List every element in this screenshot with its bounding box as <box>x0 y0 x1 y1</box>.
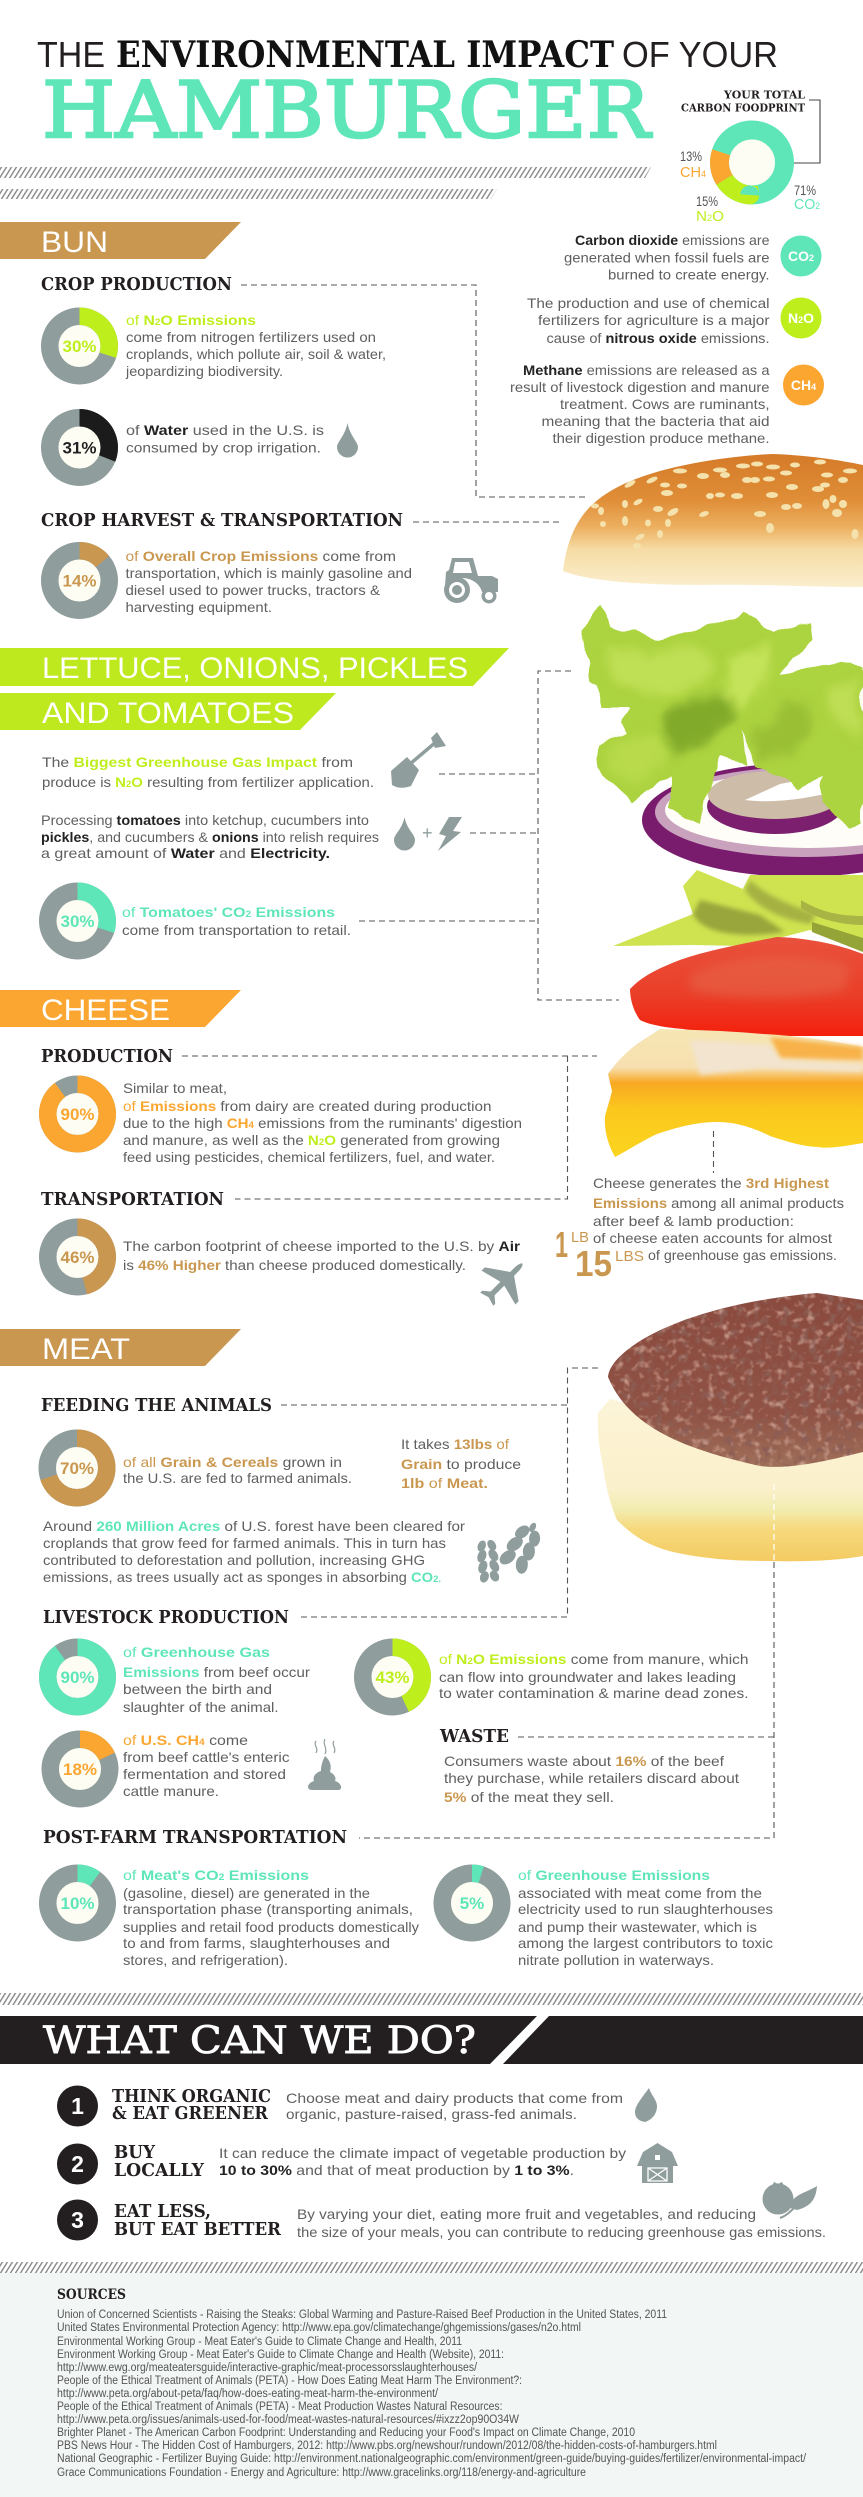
text: N2O emissions: croplands, which pollute air, soil & water, <box>126 346 386 362</box>
section banner: bun: BUN <box>41 226 108 259</box>
text: air transport: The carbon footprint of cheese imported to the U.S. by Air <box>123 1238 521 1254</box>
donut chart <box>707 118 797 207</box>
section banner: cheese <box>0 990 241 1027</box>
section banner: meat <box>0 1329 241 1366</box>
text: grain <box>123 1454 352 1486</box>
callout: cheese emissions: LBS <box>615 1248 644 1265</box>
action 3 text <box>297 2206 826 2240</box>
donut: 43% N2O: 43% <box>375 1668 410 1687</box>
nitrous oxide text: The production and use of chemical <box>527 295 770 311</box>
text: meat CO2 <box>123 1867 419 1968</box>
banner: what can we do: WHAT CAN WE DO? <box>43 2019 476 2062</box>
heading: livestock production: LIVESTOCK PRODUCTION <box>43 1607 289 1628</box>
CO2 badge <box>780 236 822 276</box>
action 2 text: It can reduce the climate impact of vegetable production by <box>219 2145 626 2161</box>
donut: 30% N2O <box>50 316 109 376</box>
action 1 text: organic, pasture-raised, grass-fed animals. <box>286 2106 577 2122</box>
action 1 title: & EAT GREENER <box>112 2103 269 2124</box>
text: processing: Processing tomatoes into ketchup, cucumbers into <box>41 812 369 828</box>
callout: cheese emissions: after beef & lamb production: <box>593 1213 794 1229</box>
sources list: PBS News Hour - The Hidden Cost of Hamburgers, 2012: http://www.pbs.org/newshour/rundown/2012/08/the-hidden-costs-of-hamburgers.html <box>57 2440 717 2452</box>
text: methane: cattle manure. <box>123 1783 219 1799</box>
text: waste: Consumers waste about 16% of the beef <box>444 1753 724 1769</box>
burger patty <box>608 1293 863 1467</box>
cheese <box>605 1029 863 1157</box>
nitrous oxide text: cause of nitrous oxide emissions. <box>546 330 770 346</box>
action 2 title: LOCALLY <box>114 2160 205 2181</box>
text: methane <box>123 1732 290 1799</box>
text: processing <box>41 812 379 861</box>
donut: 31% water <box>50 418 109 477</box>
carbon foodprint donut: 71% <box>794 182 816 198</box>
action 3 title <box>114 2201 282 2240</box>
text: meat CO2: transportation phase (transporting animals, <box>123 1901 413 1917</box>
text: forest cleared: Around 260 Million Acres of U.S. forest have been cleared for <box>43 1518 465 1534</box>
text: tomatoes <box>122 904 351 938</box>
text: dairy emissions: of Emissions from dairy are created during production <box>123 1098 492 1114</box>
donut: 46%: 46% <box>60 1248 95 1267</box>
text: water: of Water used in the U.S. is <box>126 422 324 438</box>
bottom bun <box>598 1399 863 1561</box>
icon: wheat <box>474 1515 550 1585</box>
text: manure <box>439 1651 748 1701</box>
carbon foodprint donut <box>680 88 820 225</box>
methane text: result of livestock digestion and manure <box>510 379 770 395</box>
CH4 badge: CH4 <box>791 377 816 393</box>
icon: leaf <box>635 2088 657 2122</box>
callout: cheese emissions: 1 <box>555 1224 568 1265</box>
text: methane: from beef cattle's enteric <box>123 1749 290 1765</box>
N2O badge: N2O <box>788 310 814 326</box>
text: forest cleared <box>43 1518 465 1585</box>
section banner: meat: MEAT <box>42 1333 130 1366</box>
sources list <box>57 2309 807 2479</box>
foodprint heading: YOUR TOTAL <box>723 88 805 102</box>
text: N2O emissions: come from nitrogen fertilizers used on <box>126 329 376 345</box>
section banner: cheese: CHEESE <box>41 994 170 1027</box>
donut: 30% tomatoes: 30% <box>60 912 95 931</box>
heading: post-farm transportation: POST-FARM TRANSPORTATION <box>43 1827 347 1848</box>
onion <box>642 763 863 877</box>
carbon dioxide text: Carbon dioxide emissions are <box>575 232 770 248</box>
text: tomatoes: of Tomatoes' CO 2 Emissions <box>122 904 335 920</box>
text: slaughterhouses: nitrate pollution in waterways. <box>518 1952 714 1968</box>
donut: 10%: 10% <box>60 1894 95 1913</box>
text: biggest impact: produce is N2O resulting from fertilizer application. <box>42 774 374 790</box>
carbon foodprint donut: CH4 <box>680 164 706 181</box>
title <box>37 34 778 156</box>
donut: 70% grain: 70% <box>60 1459 94 1478</box>
text: crop emissions: of Overall Crop Emissions come from <box>126 548 396 564</box>
callout: cheese emissions: 15 <box>575 1243 612 1284</box>
text: crop emissions: diesel used to power trucks, tractors & <box>126 582 381 598</box>
text: dairy emissions <box>123 1080 522 1165</box>
heading: waste: WASTE <box>439 1726 509 1747</box>
gas legend <box>510 232 824 446</box>
text: 13lbs of grain: 1lb of Meat. <box>401 1475 488 1491</box>
text: meat CO2: to and from farms, slaughterhouses and <box>123 1935 390 1951</box>
section banner: bun <box>0 222 241 259</box>
text: N2O emissions: jeopardizing biodiversity. <box>125 363 283 379</box>
donut: 10% <box>48 1873 107 1933</box>
methane text: meaning that the bacteria that aid <box>542 413 770 429</box>
text: crop emissions: transportation, which is mainly gasoline and <box>126 565 412 581</box>
donut: 90% greenhouse gas <box>48 1647 107 1707</box>
icon: shovel <box>391 732 446 788</box>
text: 13lbs of grain <box>401 1436 521 1491</box>
text: grain: the U.S. are fed to farmed animals. <box>123 1470 352 1486</box>
text: grain: of all Grain & Cereals grown in <box>123 1454 342 1470</box>
heading: transportation: TRANSPORTATION <box>41 1189 224 1210</box>
donut: 18% CH4: 18% <box>63 1760 97 1779</box>
sources list: Grace Communications Foundation - Energy and Agriculture: http://www.gracelinks.org/118/energy-and-agriculture <box>57 2467 586 2479</box>
heading: crop production: CROP PRODUCTION <box>41 274 232 295</box>
text: greenhouse gas: of Greenhouse Gas <box>123 1644 270 1660</box>
text: forest cleared: croplands that grow feed for farmed animals. This in turn has <box>43 1535 446 1551</box>
text: manure: of N2O Emissions come from manure, which <box>439 1651 748 1667</box>
action 1 title: THINK ORGANIC <box>112 2086 271 2107</box>
section banner: lettuce, onions, pickles and tomatoes <box>0 648 509 730</box>
donut: 90% dairy: 90% <box>60 1105 95 1124</box>
action 3 text: By varying your diet, eating more fruit and vegetables, and reducing <box>297 2206 756 2222</box>
callout: cheese emissions <box>555 1175 844 1284</box>
sources list: National Geographic - Fertilizer Buying Guide: http://environment.nationalgeographic.com/environment/green-guide/buying-guides/fertilizer/environmental-impact/ <box>57 2453 807 2465</box>
sources list: Environmental Working Group - Meat Eater's Guide to Climate Change and Health, 2011 <box>57 2336 462 2348</box>
text: water: consumed by crop irrigation. <box>126 440 321 456</box>
nitrous oxide text <box>527 295 770 346</box>
banner: what can we do <box>0 2016 863 2064</box>
donut: 5% <box>442 1873 502 1933</box>
action 2 text <box>219 2145 626 2178</box>
text: meat CO2: of Meat's CO 2 Emissions <box>123 1867 309 1883</box>
text: greenhouse gas: slaughter of the animal. <box>123 1699 278 1715</box>
text: greenhouse gas <box>123 1644 310 1715</box>
icon: airplane <box>470 1247 539 1316</box>
text: 13lbs of grain: It takes 13lbs of <box>401 1436 509 1452</box>
donut labels: 13% <box>680 148 702 164</box>
action 3 title: BUT EAT BETTER <box>114 2219 282 2240</box>
text: crop emissions: harvesting equipment. <box>126 599 272 615</box>
lettuce <box>580 605 863 827</box>
hamburger word: HAMBURGER <box>42 66 652 156</box>
text: waste <box>444 1753 739 1805</box>
N2O badge <box>780 298 822 338</box>
sources list: United States Environmental Protection Agency: http://www.epa.gov/climatechange/ghgemissions/gases/n2o.html <box>57 2322 581 2334</box>
action 1 title <box>112 2086 271 2124</box>
text: manure: to water contamination & marine dead zones. <box>439 1685 748 1701</box>
text: forest cleared: contributed to deforestation and pollution, increasing GHG <box>43 1552 425 1568</box>
action 2 <box>57 2142 678 2184</box>
donut: 30% N2O: 30% <box>62 337 97 356</box>
text: dairy emissions: due to the high CH4 emissions from the ruminants' digestion <box>123 1115 522 1131</box>
text: 13lbs of grain: Grain to produce <box>401 1456 521 1472</box>
icon: barn <box>637 2143 678 2183</box>
donut: 43% N2O <box>363 1647 422 1707</box>
text: slaughterhouses: electricity used to run slaughterhouses <box>518 1901 773 1917</box>
icon: water plus electricity: + <box>422 823 433 843</box>
text: dairy emissions: and manure, as well as the N2O generated from growing <box>123 1132 500 1148</box>
number 3: 3 <box>71 2207 84 2233</box>
text: meat CO2: (gasoline, diesel) are generated in the <box>123 1885 370 1901</box>
action 1 text <box>286 2090 623 2122</box>
icon: fruit and vegetable <box>762 2182 817 2218</box>
donut: 18% CH4 <box>50 1739 110 1799</box>
action 3 title: EAT LESS, <box>114 2201 211 2222</box>
text: air transport: is 46% Higher than cheese produced domestically. <box>123 1257 466 1273</box>
title line: THE <box>37 34 105 75</box>
burger illustration <box>563 454 863 1561</box>
text: slaughterhouses <box>518 1867 773 1968</box>
text: N2O emissions <box>125 312 386 379</box>
icon: water drop <box>337 423 358 458</box>
number 2: 2 <box>71 2151 84 2177</box>
callout: cheese emissions: Emissions among all animal products <box>593 1195 844 1211</box>
donut: 5%: 5% <box>460 1894 484 1913</box>
sources list: Environment Working Group - Meat Eater's Guide to Climate Change and Health (Website), 2011: <box>57 2349 504 2361</box>
sources list: http://www.peta.org/about-peta/faq/how-does-eating-meat-harm-the-environment/ <box>57 2388 439 2400</box>
callout: cheese emissions: LB <box>571 1229 589 1246</box>
text: methane: of U.S. CH 4 come <box>123 1732 248 1748</box>
heading: crop harvest: CROP HARVEST & TRANSPORTATION <box>41 510 403 531</box>
text: slaughterhouses: of Greenhouse Emissions <box>518 1867 710 1883</box>
donut: 14%: 14% <box>62 572 97 590</box>
number 2 <box>57 2144 98 2184</box>
sources list: http://www.ewg.org/meateatersguide/interactive-graphic/meat-processorsslaughterhouses/ <box>57 2362 478 2374</box>
heading: production: PRODUCTION <box>41 1046 173 1067</box>
text: forest cleared: emissions, as trees usually act as sponges in absorbing CO2. <box>43 1569 441 1585</box>
carbon dioxide text: burned to create energy. <box>608 266 770 282</box>
carbon foodprint donut: 15% <box>696 193 718 209</box>
text: manure: can flow into groundwater and lakes leading <box>439 1669 736 1685</box>
action 2 title <box>114 2142 205 2181</box>
carbon foodprint donut: N2O <box>696 208 724 225</box>
donut: 90% dairy <box>48 1084 107 1144</box>
sources heading: SOURCES <box>57 2287 126 2303</box>
donut: 30% tomatoes <box>48 891 107 951</box>
text: slaughterhouses: among the largest contributors to toxic <box>518 1935 773 1951</box>
CO2 badge: CO2 <box>788 248 814 264</box>
text: dairy emissions: Similar to meat, <box>123 1080 227 1096</box>
text: greenhouse gas: between the birth and <box>123 1681 272 1697</box>
carbon dioxide text: generated when fossil fuels are <box>564 250 770 266</box>
heading: feeding the animals: FEEDING THE ANIMALS <box>41 1395 272 1416</box>
donut: 70% grain <box>47 1438 107 1498</box>
action 3 text: the size of your meals, you can contribute to reducing greenhouse gas emissions. <box>297 2224 826 2240</box>
callout: cheese emissions: of greenhouse gas emissions. <box>648 1247 837 1263</box>
text: processing: a great amount of Water and Electricity. <box>41 845 330 861</box>
text: biggest impact <box>42 754 374 790</box>
panel: sources <box>0 2262 863 2497</box>
text: processing: pickles, and cucumbers & onions into relish requires <box>41 829 379 845</box>
carbon foodprint donut: CARBON FOODPRINT <box>681 100 805 114</box>
text: air transport <box>123 1238 521 1273</box>
number 3 <box>57 2200 98 2240</box>
carbon foodprint donut: CO2 <box>794 196 820 213</box>
text: N2O emissions: of N2O Emissions <box>126 312 256 328</box>
section banner: lettuce, onions, pickles and tomatoes: AND TOMATOES <box>42 697 294 730</box>
sources list: Brighter Planet - The American Carbon Foodprint: Understanding and Reducing your Food's Impact on Climate Change, 2010 <box>57 2427 635 2439</box>
methane text: Methane emissions are released as a <box>523 362 770 378</box>
top bun <box>563 454 863 587</box>
tomato <box>630 937 863 1036</box>
section banner: lettuce, onions, pickles and tomatoes: LETTUCE, ONIONS, PICKLES <box>42 652 468 685</box>
donut: 46% <box>48 1227 107 1287</box>
text: water <box>126 422 324 456</box>
text: waste: 5% of the meat they sell. <box>444 1789 614 1805</box>
text: meat CO2: stores, and refrigeration). <box>123 1952 288 1968</box>
nitrous oxide text: fertilizers for agriculture is a major <box>538 312 770 328</box>
methane text: treatment. Cows are ruminants, <box>560 396 770 412</box>
donut: 90% greenhouse gas: 90% <box>60 1668 95 1687</box>
icon: manure <box>308 1739 341 1790</box>
carbon dioxide text <box>564 232 770 282</box>
text: slaughterhouses: and pump their wastewater, which is <box>518 1919 757 1935</box>
callout: cheese emissions: of cheese eaten accounts for almost <box>593 1230 832 1246</box>
text: crop emissions <box>126 548 412 615</box>
sources list: People of the Ethical Treatment of Animals (PETA) - How Does Eating Meat Harm The Environment?: <box>57 2375 522 2387</box>
methane text <box>510 362 770 446</box>
text: biggest impact: The Biggest Greenhouse Gas Impact from <box>42 754 353 770</box>
donut: 14% <box>50 551 109 610</box>
action 2 title: BUY <box>114 2142 156 2163</box>
text: waste: they purchase, while retailers discard about <box>444 1770 739 1786</box>
icon: tractor <box>444 558 498 604</box>
number 1: 1 <box>71 2093 84 2119</box>
text: tomatoes: come from transportation to retail. <box>122 922 351 938</box>
pickles <box>613 870 863 952</box>
text: meat CO2: supplies and retail food products domestically <box>123 1919 419 1935</box>
sources list: Union of Concerned Scientists - Raising the Steaks: Global Warming and Pasture-Raised Beef Production in the United States, 2011 <box>57 2309 667 2321</box>
title: OF YOUR <box>622 34 778 75</box>
icon: water plus electricity <box>394 817 462 851</box>
callout: cheese emissions: Cheese generates the 3rd Highest <box>593 1175 829 1191</box>
sources list: People of the Ethical Treatment of Animals (PETA) - Meat Production Wastes Natural Resources: <box>57 2401 502 2413</box>
action 2 text: 10 to 30% and that of meat production by 1 to 3% . <box>219 2162 574 2178</box>
text: greenhouse gas: Emissions from beef occur <box>123 1664 310 1680</box>
action 3 <box>57 2182 826 2240</box>
action 1 <box>57 2086 657 2126</box>
text: dairy emissions: feed using pesticides, chemical fertilizers, fuel, and water. <box>123 1149 495 1165</box>
title: ENVIRONMENTAL IMPACT <box>116 34 614 76</box>
CH4 badge <box>783 364 824 406</box>
sources list: http://www.peta.org/issues/animals-used-for-food/meat-wastes-natural-resources/#ixzz2op90O34W <box>57 2414 519 2426</box>
text: methane: fermentation and stored <box>123 1766 286 1782</box>
methane text: their digestion produce methane. <box>552 430 770 446</box>
donut: 31% water: 31% <box>62 438 97 458</box>
action 1 text: Choose meat and dairy products that come from <box>286 2090 623 2106</box>
number 1 <box>57 2086 98 2126</box>
text: slaughterhouses: associated with meat come from the <box>518 1885 762 1901</box>
